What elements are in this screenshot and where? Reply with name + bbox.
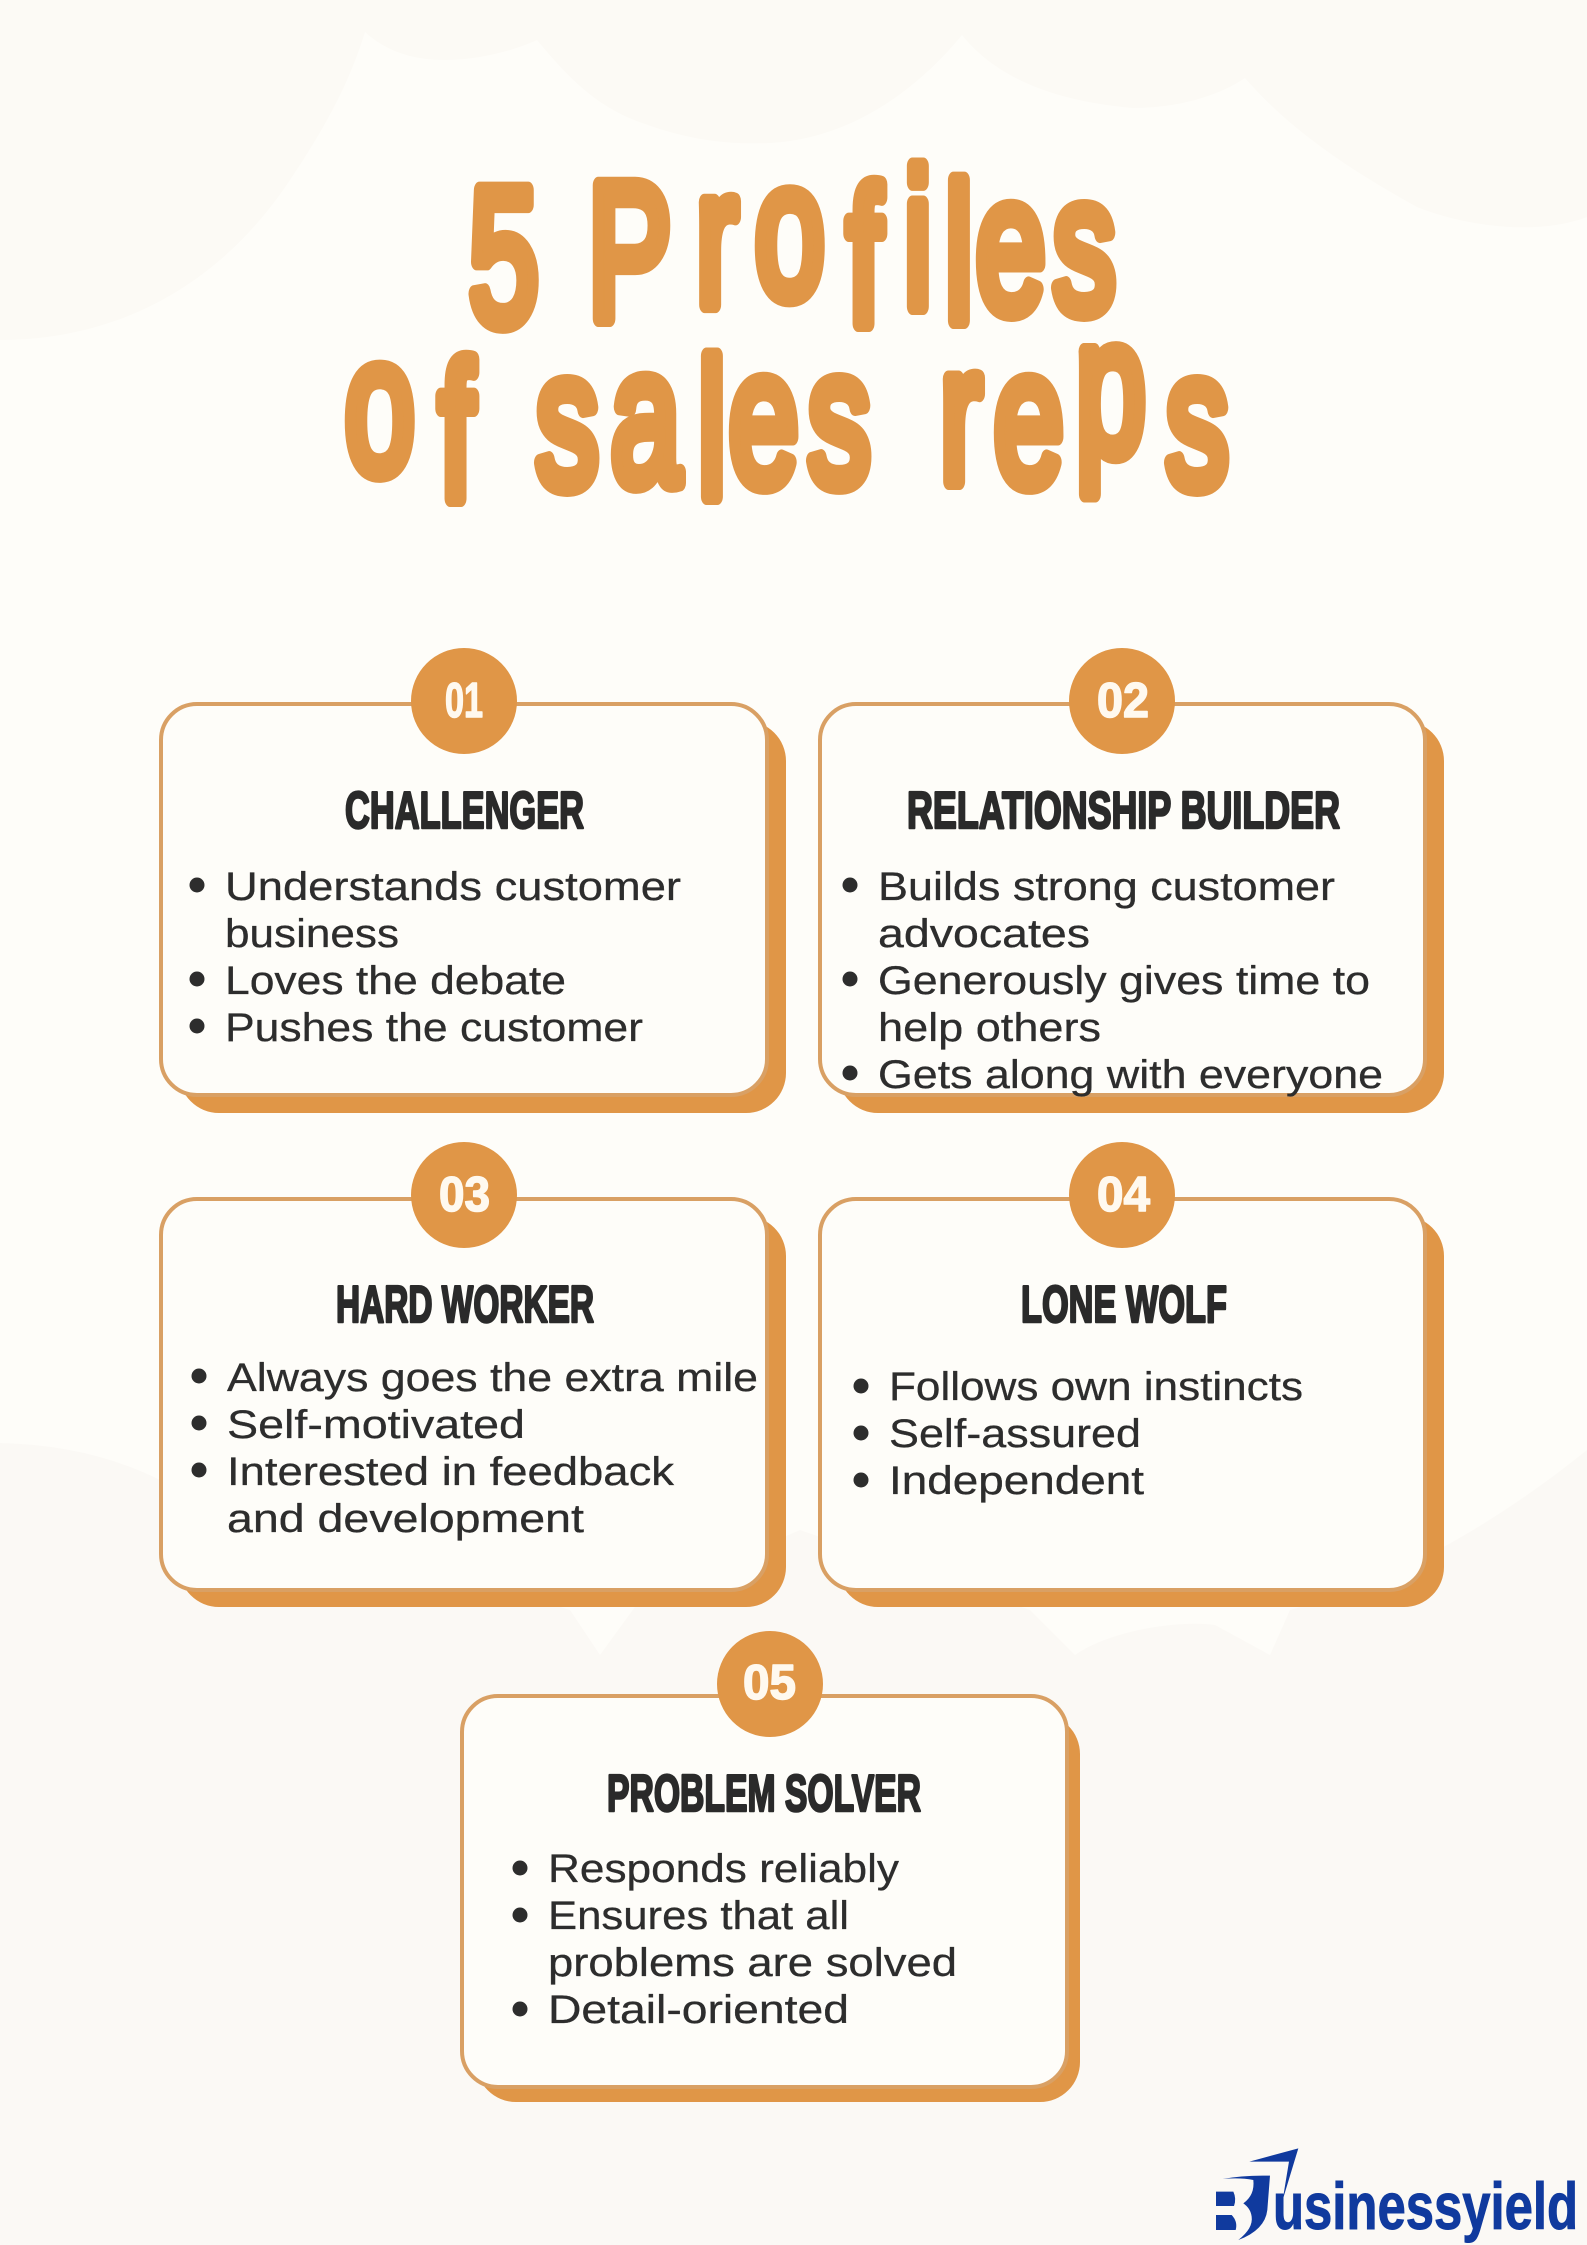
number badge 03: 03 [439, 1168, 490, 1222]
number badge 03 [411, 1142, 517, 1248]
number badge 02: 02 [1097, 674, 1149, 728]
bullet list: hard worker: and development [227, 1497, 584, 1541]
number badge 02 [1069, 648, 1175, 754]
panel: problem solver [462, 1631, 1080, 2102]
bullet list: relationship builder [842, 865, 1383, 1097]
panel: challenger [161, 648, 786, 1113]
heading: challenger: CHALLENGER [345, 782, 584, 840]
bullet list: relationship builder: Generously gives time to [878, 959, 1370, 1003]
bullet list: relationship builder: Builds strong customer [878, 865, 1335, 909]
bullet list: relationship builder: Gets along with everyone [878, 1053, 1383, 1097]
bullet list: challenger: Understands customer [225, 865, 681, 909]
heading: lone wolf: LONE WOLF [1021, 1276, 1227, 1334]
bullet list: hard worker: Interested in feedback [227, 1450, 675, 1494]
number badge 05 [717, 1631, 823, 1737]
bullet list: problem solver: problems are solved [548, 1941, 957, 1985]
title: 5 Profiles [469, 121, 1115, 365]
number badge 01 [411, 648, 517, 754]
panel: hard worker [161, 1142, 786, 1607]
bullet list: problem solver: Ensures that all [548, 1894, 849, 1938]
bullet list: hard worker: Self-motivated [227, 1403, 525, 1447]
panel: lone wolf [820, 1142, 1444, 1607]
bullet list: challenger: Pushes the customer [225, 1006, 643, 1050]
bullet list: lone wolf: Independent [889, 1459, 1144, 1503]
heading: relationship builder: RELATIONSHIP BUILDER [907, 782, 1340, 840]
number badge 04: 04 [1097, 1168, 1150, 1222]
logo: businessyield [1216, 2148, 1578, 2243]
bullet list: problem solver: Responds reliably [548, 1847, 899, 1891]
heading: problem solver: PROBLEM SOLVER [607, 1765, 921, 1823]
bullet list: challenger: business [225, 912, 399, 956]
bullet list: challenger [190, 865, 681, 1050]
heading: hard worker: HARD WORKER [336, 1276, 594, 1334]
bullet list: lone wolf: Follows own instincts [889, 1365, 1303, 1409]
title: of sales reps [345, 278, 1228, 540]
bullet list: hard worker [192, 1356, 758, 1541]
title [345, 121, 1228, 540]
bullet list: relationship builder: advocates [878, 912, 1090, 956]
bullet list: lone wolf: Self-assured [889, 1412, 1141, 1456]
bullet list: challenger: Loves the debate [225, 959, 566, 1003]
number badge 05: 05 [743, 1656, 796, 1710]
bullet list: relationship builder: help others [878, 1006, 1101, 1050]
panel: relationship builder [820, 648, 1444, 1113]
bullet list: problem solver: Detail-oriented [548, 1988, 849, 2032]
bullet list: hard worker: Always goes the extra mile [227, 1356, 758, 1400]
number badge 04 [1069, 1142, 1175, 1248]
bullet list: lone wolf [854, 1365, 1303, 1503]
number badge 01: 01 [445, 674, 483, 728]
bullet list: problem solver [512, 1847, 957, 2032]
